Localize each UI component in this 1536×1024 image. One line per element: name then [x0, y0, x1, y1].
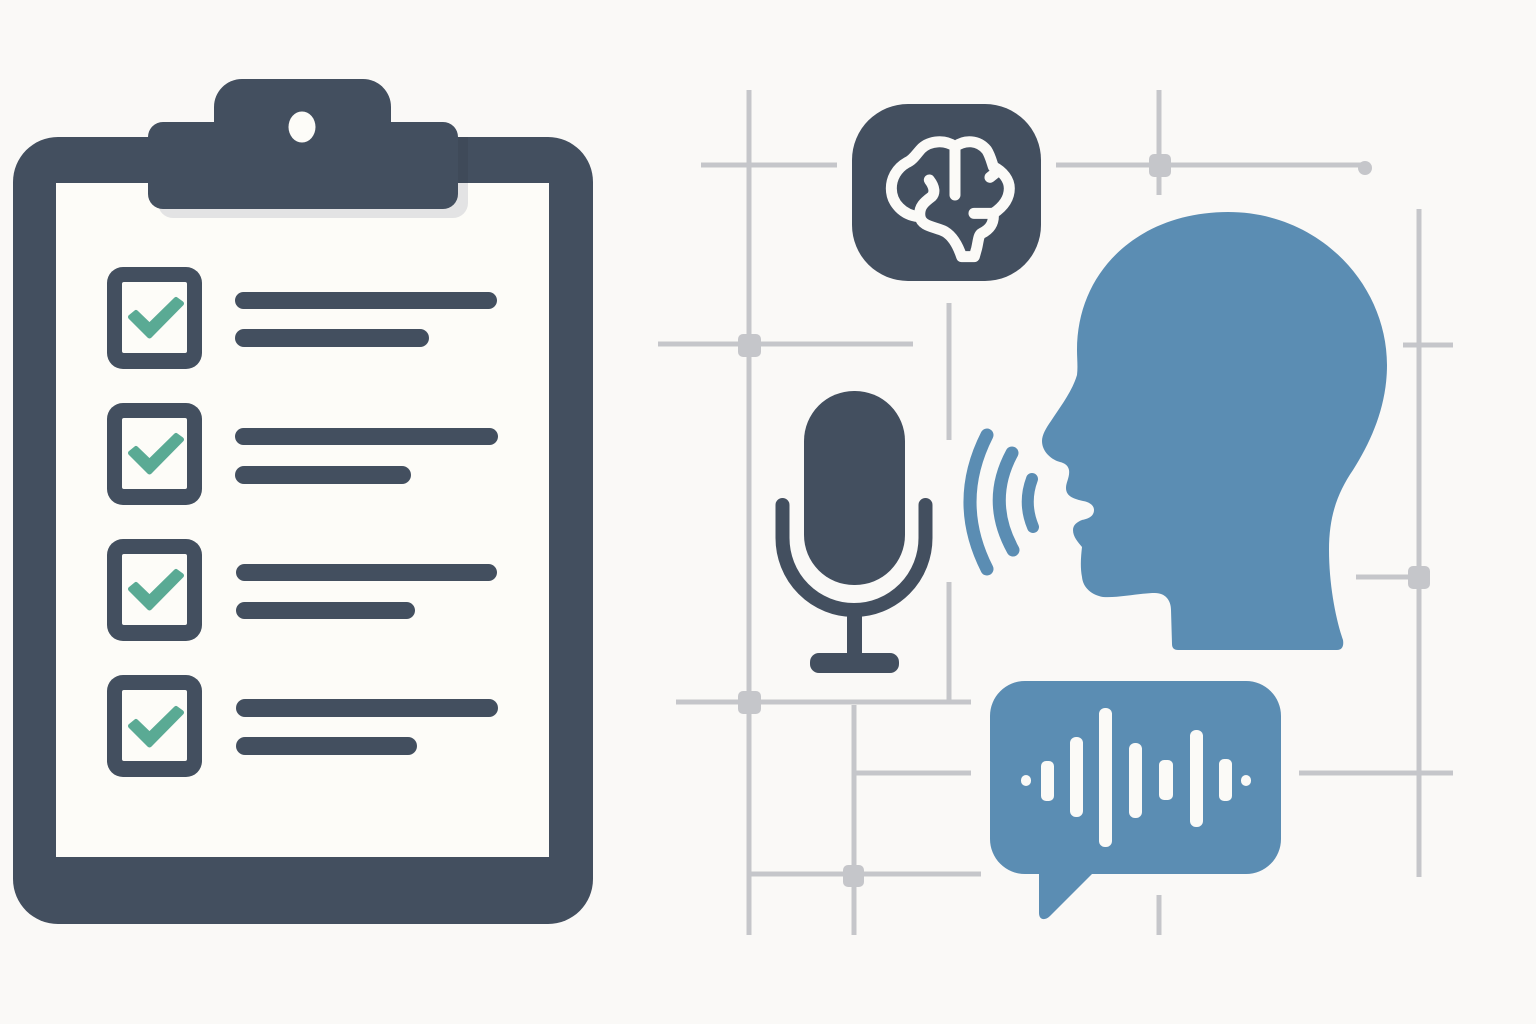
clipboard board: [13, 137, 593, 924]
icon: microphone: [782, 391, 926, 673]
checklist item 3: [107, 539, 497, 641]
clip shadow: [158, 137, 468, 218]
waveform: [1021, 708, 1251, 847]
checklist item 2: [107, 403, 498, 505]
speech bubble with waveform: [990, 681, 1281, 919]
clipboard: [13, 79, 593, 924]
checklist item 1: [107, 267, 497, 369]
icon: speaking head: [1042, 212, 1387, 650]
checklist item 4: [107, 675, 498, 777]
clipboard paper: [56, 183, 549, 857]
icon: brain: [852, 104, 1041, 281]
icon: sound waves: [970, 435, 1033, 569]
clip: [148, 79, 458, 209]
